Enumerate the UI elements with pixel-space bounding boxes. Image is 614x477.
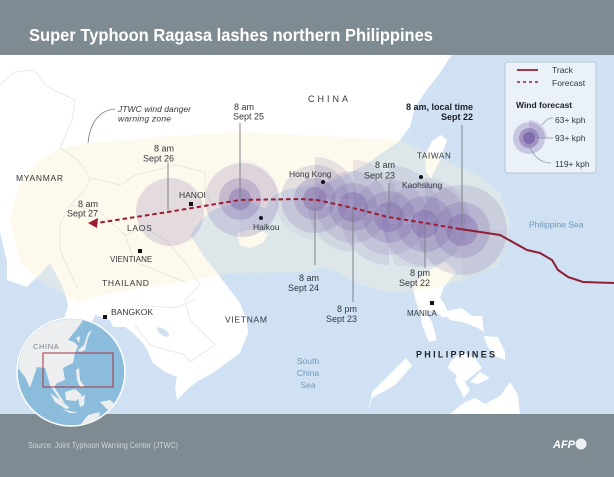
legend panel (505, 62, 596, 173)
date labels (67, 102, 473, 324)
sea labels: Philippine Sea (529, 220, 584, 230)
country labels: CHINA (308, 94, 351, 104)
land masses (0, 55, 520, 414)
sea background (0, 50, 614, 420)
bubble: Sept 25 (205, 160, 279, 238)
country labels: MYANMAR (16, 173, 64, 183)
date labels: 8 am, local time (406, 102, 473, 112)
legend panel: 63+ kph (555, 115, 586, 125)
date labels: 8 am (154, 144, 174, 154)
AFP logo: AFP (552, 439, 576, 451)
legend panel: Track (552, 65, 574, 75)
bubble: Sept 23 8am (341, 165, 441, 265)
footer bar (0, 414, 614, 477)
wind radii bubbles (136, 157, 510, 278)
legend panel: Forecast (552, 78, 586, 88)
date labels: 8 am (375, 160, 395, 170)
typhoon forecast track (97, 199, 460, 229)
country labels: THAILAND (102, 278, 150, 288)
city labels: VIENTIANE (110, 255, 152, 264)
annotation: wind danger zone: JTWC wind danger (117, 104, 192, 114)
country labels (16, 94, 497, 360)
sea labels: China (297, 368, 319, 378)
date labels: 8 am (299, 273, 319, 283)
bubble: Sept 22 8am (417, 185, 510, 278)
bubble: Sept 26 (136, 178, 204, 246)
sea labels: South (297, 356, 319, 366)
date labels: Sept 24 (288, 283, 319, 293)
sea labels (297, 220, 584, 390)
city labels: BANGKOK (111, 307, 153, 317)
globe land (18, 319, 114, 424)
globe label: CHINA (33, 342, 59, 351)
legend: wind icon (513, 120, 547, 154)
date labels: 8 pm (410, 268, 430, 278)
forecast arrowhead (88, 218, 98, 228)
title: Super Typhoon Ragasa lashes northern Philippines (29, 25, 433, 45)
source: Source: Joint Typhoon Warning Center (JTWC) (28, 441, 178, 450)
annotation: wind danger zone: warning zone (118, 114, 171, 124)
bubble: Sept 24 (275, 157, 357, 239)
title bar (0, 0, 614, 55)
country labels: LAOS (127, 223, 152, 233)
date labels: Sept 22 (399, 278, 430, 288)
country labels: PHILIPPINES (416, 350, 497, 360)
city labels: Kaohsiung (402, 180, 442, 190)
sea labels: Sea (300, 380, 316, 390)
date labels: Sept 25 (233, 112, 264, 122)
city labels: Hong Kong (289, 169, 332, 179)
date labels: Sept 23 (326, 314, 357, 324)
locator globe (10, 310, 125, 426)
country labels: VIETNAM (225, 314, 268, 324)
city labels (103, 169, 442, 319)
city labels: MANILA (407, 309, 437, 318)
city labels: Haikou (253, 222, 280, 232)
city labels: HANOI (179, 190, 206, 200)
typhoon observed track (460, 229, 614, 283)
legend panel: 119+ kph (555, 159, 590, 169)
date labels: Sept 23 (364, 170, 395, 180)
AFP logo (552, 438, 586, 451)
bubble: Sept 22 8pm (381, 178, 471, 268)
date leader lines (168, 123, 462, 302)
legend: forecast line (517, 81, 538, 83)
date labels: Sept 27 (67, 208, 98, 218)
date labels: 8 am (78, 199, 98, 209)
date labels: Sept 22 (441, 112, 473, 122)
date labels: 8 am (234, 102, 254, 112)
legend panel: 93+ kph (555, 133, 586, 143)
date labels: Sept 26 (143, 154, 174, 164)
warning zone over sea (37, 140, 510, 294)
bubble: Sept 23 8pm (308, 160, 400, 252)
annotation: wind danger zone (88, 104, 192, 143)
legend: track line (517, 69, 538, 71)
country labels: TAIWAN (417, 152, 451, 160)
lake Tonle Sap (156, 326, 170, 338)
legend panel: Wind forecast (516, 100, 572, 110)
globe locator rectangle (43, 353, 113, 387)
warning zone over land (10, 132, 456, 303)
date labels: 8 pm (337, 304, 357, 314)
country borders (0, 70, 215, 362)
